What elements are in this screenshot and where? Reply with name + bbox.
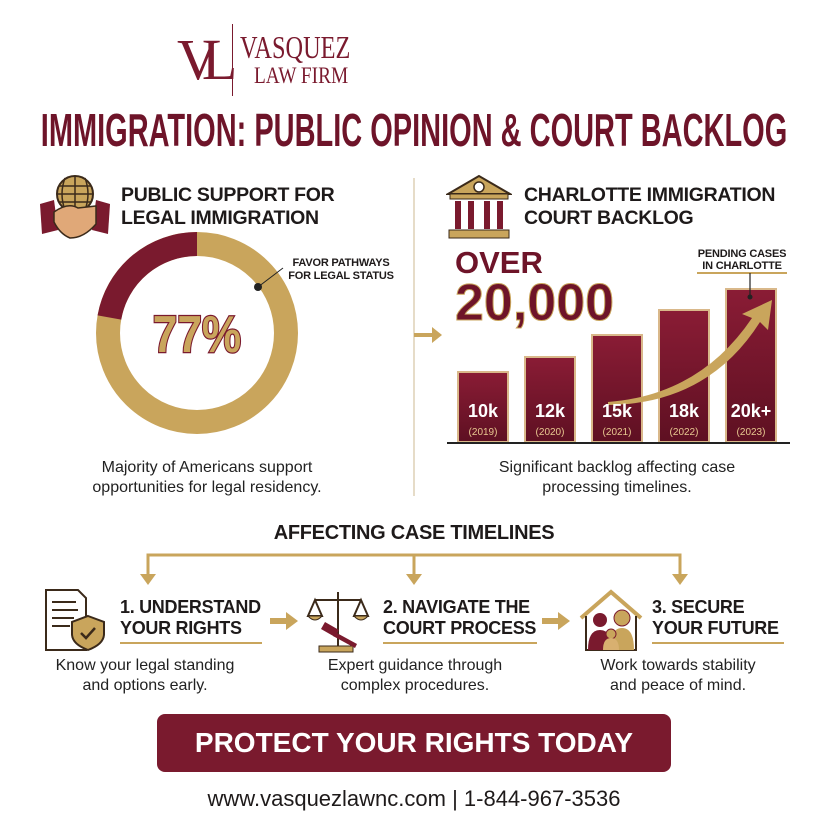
- CTA button: PROTECT YOUR RIGHTS TODAY: [195, 727, 633, 758]
- heading: public support: LEGAL IMMIGRATION: [121, 207, 319, 229]
- callout: pending cases: PENDING CASES: [698, 248, 786, 260]
- step description: Expert guidance through: [328, 657, 502, 674]
- heading: court backlog: [524, 184, 775, 229]
- CTA button: [157, 714, 671, 772]
- step description: [328, 657, 502, 694]
- bar chart: 15k: [602, 401, 633, 421]
- caption right: Significant backlog affecting case: [499, 459, 735, 476]
- callout: pending cases: [698, 248, 786, 272]
- step title: 1. UNDERSTAND: [120, 597, 261, 617]
- bar chart: (2021): [603, 427, 631, 438]
- step 2: [306, 592, 537, 694]
- logo: [177, 24, 350, 96]
- step description: and options early.: [82, 677, 208, 694]
- bar chart: 20k+: [731, 401, 771, 421]
- callout: pending cases: IN CHARLOTTE: [702, 260, 782, 272]
- step title: [383, 597, 536, 638]
- step description: and peace of mind.: [610, 677, 746, 694]
- icon: scales and gavel: [306, 592, 370, 652]
- caption right: [499, 459, 735, 496]
- footer contact: www.vasquezlawnc.com | 1-844-967-3536: [208, 786, 620, 811]
- bar chart: 18k: [669, 401, 700, 421]
- donut chart: 77%: [153, 306, 241, 364]
- step description: [600, 657, 756, 694]
- caption left: Majority of Americans support: [102, 459, 312, 476]
- bar chart: (2022): [670, 427, 698, 438]
- bar chart: (2019): [469, 427, 497, 438]
- big stat: 20,000: [455, 274, 614, 332]
- step description: Know your legal standing: [56, 657, 234, 674]
- logo monogram: VL: [177, 27, 220, 92]
- icon: house family: [580, 590, 642, 651]
- step 1: [45, 589, 262, 694]
- step title: 2. NAVIGATE THE: [383, 597, 530, 617]
- big stat: [455, 245, 614, 332]
- arrow: step 1 to 2: [270, 612, 298, 630]
- arrow: step 2 to 3: [542, 612, 570, 630]
- big stat: OVER: [455, 245, 543, 280]
- step description: complex procedures.: [341, 677, 489, 694]
- callout: favor pathways: FAVOR PATHWAYS: [292, 257, 390, 269]
- heading: court backlog: CHARLOTTE IMMIGRATION: [524, 184, 775, 206]
- step title: [652, 597, 779, 638]
- step description: [56, 657, 234, 694]
- bar chart: (2023): [737, 427, 765, 438]
- bar chart: (2020): [536, 427, 564, 438]
- icon: document shield: [45, 589, 105, 652]
- step title: YOUR RIGHTS: [120, 618, 242, 638]
- icon: courthouse: [446, 174, 512, 238]
- caption right: processing timelines.: [542, 479, 692, 496]
- bar chart: 12k: [535, 401, 566, 421]
- donut chart: [96, 232, 298, 434]
- bar chart: [447, 272, 790, 444]
- heading: public support: PUBLIC SUPPORT FOR: [121, 184, 334, 206]
- caption left: [92, 459, 322, 496]
- step description: Work towards stability: [600, 657, 756, 674]
- heading: court backlog: COURT BACKLOG: [524, 207, 693, 229]
- firm name: VASQUEZ: [240, 29, 350, 65]
- step title: COURT PROCESS: [383, 618, 536, 638]
- section heading: affecting timelines: AFFECTING CASE TIMELINES: [274, 522, 554, 544]
- step 3: [580, 590, 784, 694]
- bar chart: 10k: [468, 401, 499, 421]
- step title: [120, 597, 261, 638]
- bracket arrows: [140, 554, 688, 585]
- caption left: opportunities for legal residency.: [92, 479, 322, 496]
- logo: LAW FIRM: [254, 63, 348, 88]
- callout: favor pathways: FOR LEGAL STATUS: [288, 270, 394, 282]
- step title: YOUR FUTURE: [652, 618, 779, 638]
- arrow: center: [414, 327, 442, 343]
- heading: public support: [121, 184, 334, 229]
- icon: globe handshake: [40, 175, 110, 239]
- step title: 3. SECURE: [652, 597, 744, 617]
- callout: favor pathways: [288, 257, 394, 282]
- title: IMMIGRATION: PUBLIC OPINION & COURT BACKLOG: [41, 104, 787, 156]
